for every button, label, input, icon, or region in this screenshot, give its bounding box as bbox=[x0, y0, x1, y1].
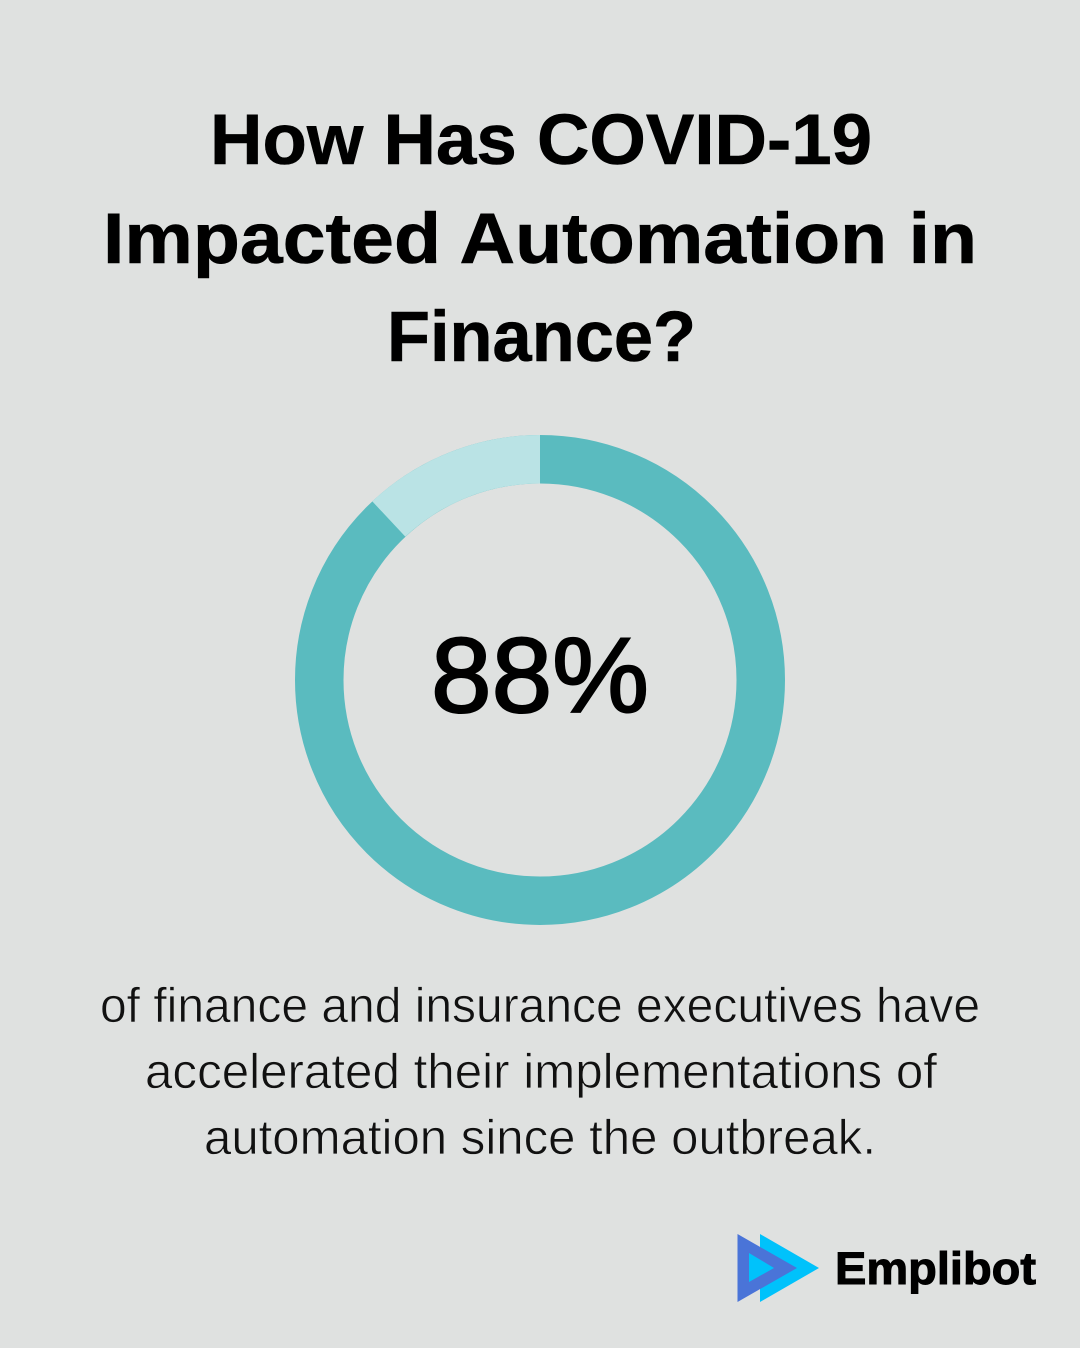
description text: accelerated their implementations of bbox=[145, 1045, 937, 1099]
value: 88%: 88% bbox=[431, 615, 649, 735]
logo: Emplibot bbox=[738, 1234, 1036, 1302]
icon: play triangles bbox=[738, 1234, 819, 1302]
title: Impacted Automation in bbox=[103, 200, 977, 279]
description text: automation since the outbreak. bbox=[204, 1111, 876, 1165]
title bbox=[103, 101, 977, 377]
logo wordmark: Emplibot bbox=[835, 1243, 1036, 1294]
description text: of finance and insurance executives have bbox=[100, 979, 980, 1033]
title: Finance? bbox=[387, 298, 696, 377]
description text bbox=[100, 979, 980, 1165]
donut chart: 88% bbox=[319, 435, 761, 901]
title: How Has COVID-19 bbox=[210, 101, 872, 180]
